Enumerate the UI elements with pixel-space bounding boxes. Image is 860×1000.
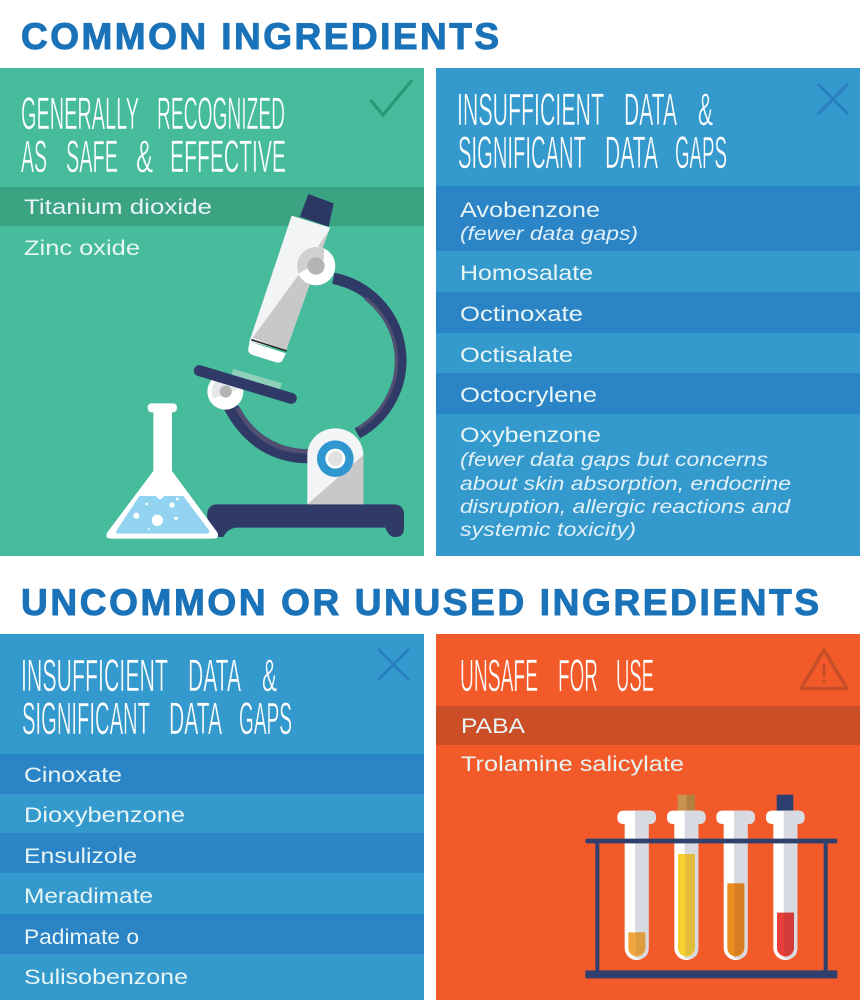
panel title: GENERALLY (21, 88, 139, 139)
ingredient row: oxybenzone: systemic toxicity) (460, 519, 636, 541)
panel: unsafe for use: USE (616, 650, 654, 701)
panel: generally recognized as safe and effective (0, 68, 424, 556)
illustration: flask (106, 403, 218, 539)
panel title: & (262, 650, 277, 701)
ingredient row: oxybenzone (460, 424, 791, 541)
ingredient row: dioxybenzone: Dioxybenzone (24, 804, 185, 827)
panel title: DATA (169, 693, 222, 744)
ingredient row: cinoxate: Cinoxate (24, 764, 122, 787)
ingredient row: octocrylene: Octocrylene (460, 384, 597, 407)
ingredient row: oxybenzone: Oxybenzone (460, 424, 601, 447)
panel: unsafe for use (436, 634, 860, 1000)
ingredient row: ensulizole (0, 833, 424, 873)
tube 4 (766, 811, 805, 960)
icon: check mark (370, 80, 412, 115)
ingredient row: avobenzone (436, 186, 860, 251)
panel: insufficient data (uncommon) (0, 634, 424, 1000)
panel title: UNSAFE (460, 650, 538, 701)
panel title: SAFE (66, 131, 118, 182)
ingredient row: padimate o (0, 914, 424, 954)
tube 2 (667, 811, 706, 960)
ingredient row: trolamine salicylate: Trolamine salicylate (461, 753, 684, 776)
panel title (21, 88, 286, 182)
ingredient row: oxybenzone: (fewer data gaps but concerns (460, 449, 768, 471)
ingredient row: oxybenzone: disruption, allergic reactions and (460, 496, 791, 518)
icon: x mark (818, 84, 848, 114)
ingredient row: titanium dioxide: Titanium dioxide (24, 196, 212, 219)
panel title: & (136, 131, 153, 182)
panel title: DATA (188, 650, 241, 701)
panel: generally recognized as safe and effective: RECOGNIZED (157, 88, 285, 139)
panel title (457, 84, 727, 178)
panel title: SIGNIFICANT (458, 127, 586, 178)
panel: insufficient data (common): GAPS (675, 127, 727, 178)
panel title (21, 650, 292, 744)
ingredient row: homosalate: Homosalate (460, 262, 593, 285)
panel: insufficient data (uncommon): GAPS (239, 693, 292, 744)
tube 1 (617, 811, 656, 960)
ingredient row: padimate o: Padimate o (24, 926, 139, 949)
heading: common ingredients: COMMON INGREDIENTS (21, 16, 499, 57)
ingredient row: octisalate: Octisalate (460, 344, 573, 367)
ingredient row: octocrylene (436, 373, 860, 414)
ingredient row: zinc oxide: Zinc oxide (24, 237, 140, 260)
tube 3 (716, 811, 755, 960)
ingredient row: avobenzone: (fewer data gaps) (460, 223, 638, 245)
panel title: FOR (558, 650, 598, 701)
panel title: & (698, 84, 713, 135)
ingredient row: cinoxate (0, 754, 424, 794)
ingredient row: sulisobenzone: Sulisobenzone (24, 966, 188, 989)
panel title: INSUFFICIENT (21, 650, 168, 701)
panel title: SIGNIFICANT (22, 693, 150, 744)
ingredient row: meradimate: Meradimate (24, 885, 153, 908)
icon: warning triangle (801, 650, 847, 688)
panel title: DATA (624, 84, 677, 135)
ingredient row: paba (436, 706, 860, 745)
illustration: test tube rack (585, 795, 837, 978)
ingredient row: octinoxate: Octinoxate (460, 303, 583, 326)
panel: insufficient data (common) (436, 68, 860, 556)
rack frame (585, 839, 837, 978)
ingredient row: titanium dioxide (0, 187, 424, 226)
ingredient row: ensulizole: Ensulizole (24, 845, 137, 868)
panel title: INSUFFICIENT (457, 84, 604, 135)
icon: x mark (378, 649, 409, 680)
ingredient row: oxybenzone: about skin absorption, endocrine (460, 473, 791, 495)
ingredient row: paba: PABA (461, 715, 525, 738)
illustration: microscope (199, 194, 404, 537)
panel title: DATA (605, 127, 658, 178)
panel title: AS (21, 131, 47, 182)
heading: uncommon or unused ingredients: UNCOMMON OR UNUSED INGREDIENTS (21, 582, 819, 623)
ingredient row: avobenzone: Avobenzone (460, 199, 600, 222)
panel: generally recognized as safe and effective: EFFECTIVE (170, 131, 286, 182)
ingredient row: octinoxate (436, 292, 860, 333)
